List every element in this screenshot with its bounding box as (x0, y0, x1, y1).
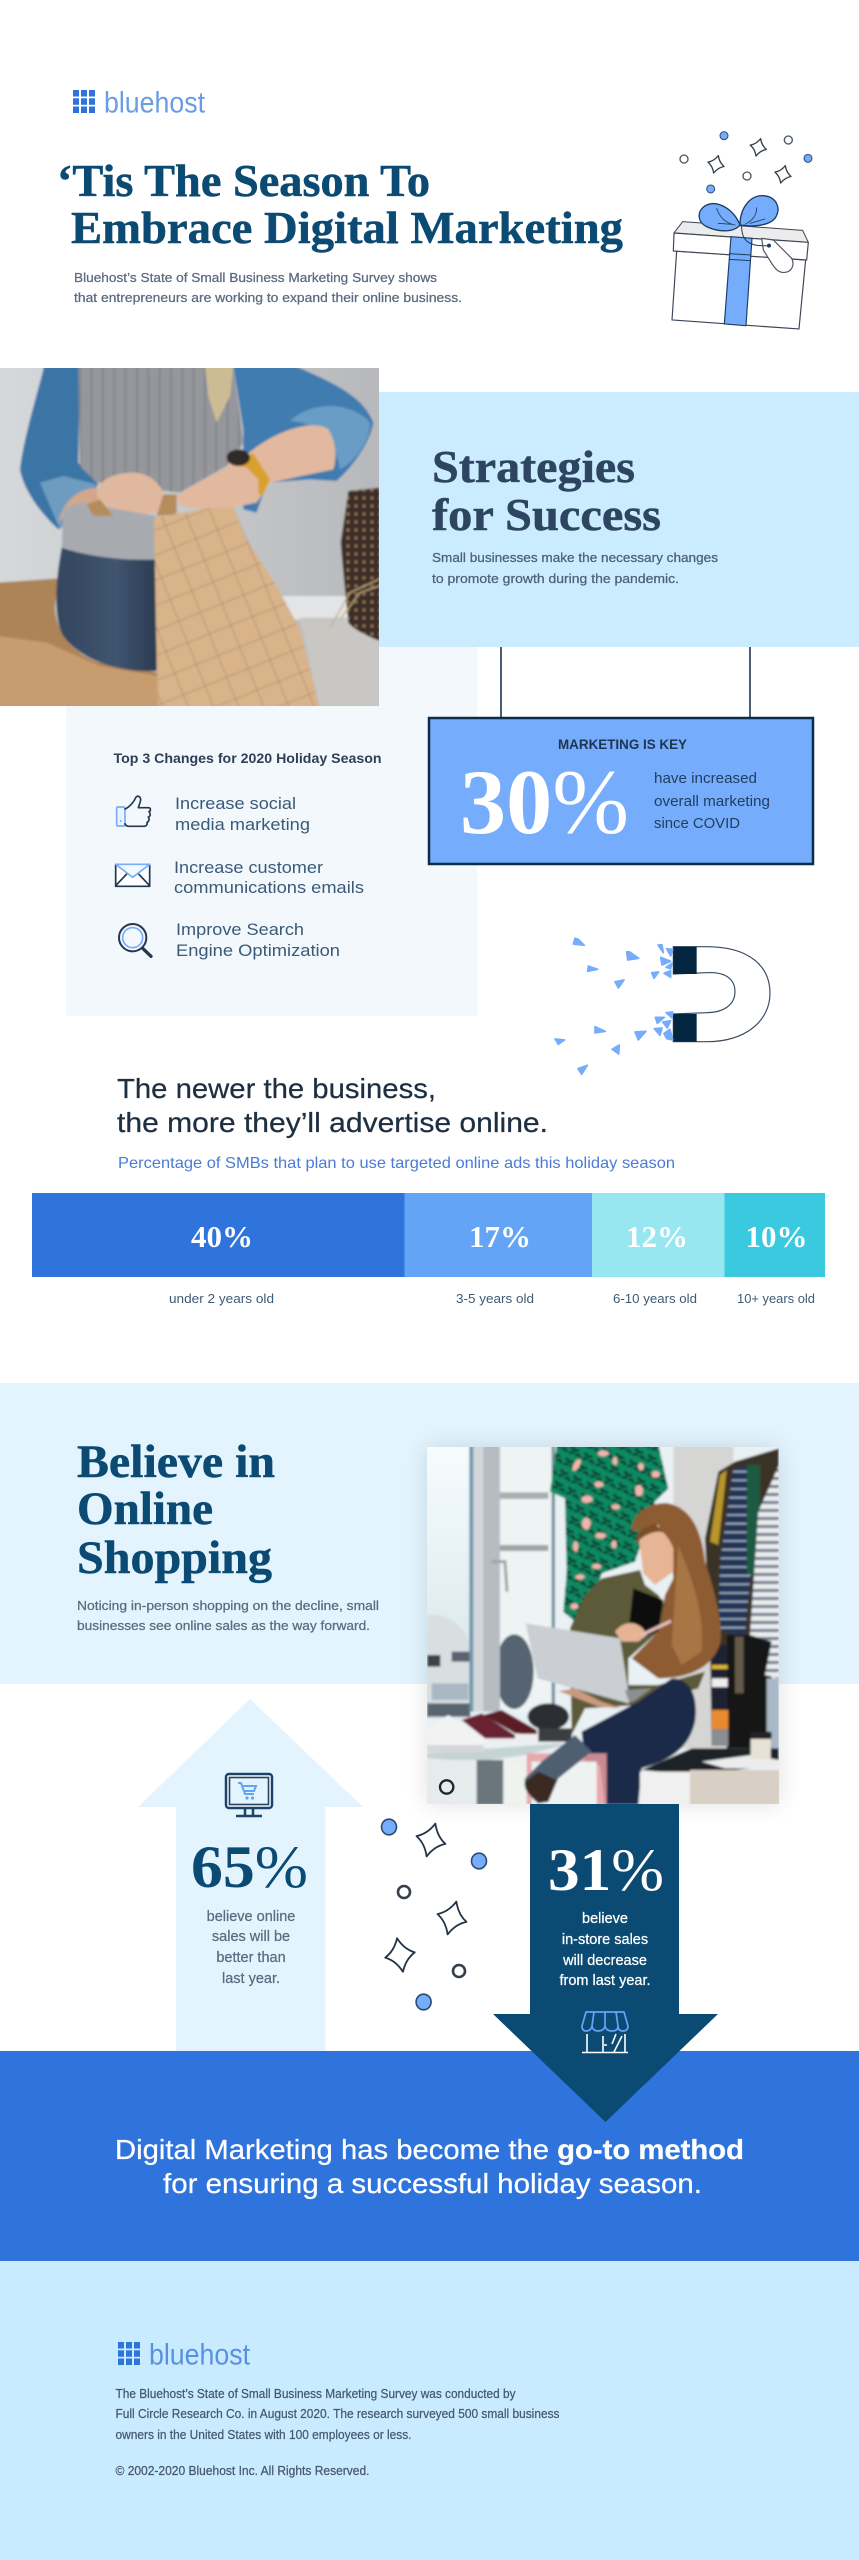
text: online shopping intro (77, 1598, 379, 1633)
logo: bluehost footer: bluehost (149, 2338, 251, 2372)
heading: believe in online shopping: Online (77, 1483, 213, 1535)
heading: believe in online shopping (77, 1436, 275, 1584)
heading: believe in online shopping: Shopping (77, 1532, 272, 1584)
arrow: up 65 percent: better than (216, 1950, 286, 1966)
text: increase customer communications emails (174, 858, 364, 897)
bar chart: targeted online ads by business age: 6-10 years old (613, 1291, 697, 1306)
text: improve search engine optimization: Improve Search (176, 920, 304, 939)
bar chart: targeted online ads by business age: 10+ years old (737, 1291, 815, 1306)
heading: the newer the business: The newer the business, (117, 1073, 436, 1104)
bar chart: targeted online ads by business age: 12% (626, 1219, 688, 1254)
bar chart: targeted online ads by business age: 17% (469, 1219, 531, 1254)
sign: marketing is key: since COVID (654, 816, 740, 832)
arrow: up 65 percent: believe online (207, 1909, 295, 1925)
arrow: down 31 percent (493, 1804, 718, 2122)
bar chart: targeted online ads by business age: 40% (191, 1219, 253, 1254)
intro text: Bluehost’s State of Small Business Marketing Survey shows (74, 270, 438, 285)
icon: storefront (582, 2012, 628, 2052)
arrow: up 65 percent: 65% (191, 1834, 308, 1900)
text: increase social media marketing: media marketing (175, 815, 310, 834)
arrow: up 65 percent: sales will be (212, 1929, 290, 1945)
icon: thumbs up (117, 796, 150, 826)
conclusion text: Digital Marketing has become the go-to method (115, 2134, 744, 2165)
panel: top 3 changes background (66, 647, 477, 1016)
arrow: down 31 percent: will decrease (562, 1953, 647, 1969)
panel: blue conclusion band (0, 2051, 859, 2261)
text: increase customer communications emails: communications emails (174, 878, 364, 897)
heading: top 3 changes: Top 3 Changes for 2020 Holiday Season (114, 751, 382, 766)
bar chart: targeted online ads by business age (32, 1193, 825, 1306)
intro text: that entrepreneurs are working to expand their online business. (74, 290, 462, 305)
arrow: up 65 percent: last year. (222, 1971, 280, 1987)
heading: the newer the business: the more they’ll advertise online. (117, 1107, 548, 1138)
heading: strategies for success (432, 441, 661, 540)
conclusion text: for ensuring a successful holiday season. (163, 2168, 702, 2199)
arrow: down 31 percent: believe (582, 1911, 628, 1927)
text: improve search engine optimization: Engine Optimization (176, 941, 340, 960)
decoration: sparkles and dots (382, 1819, 486, 2010)
text: strategies intro: to promote growth during the pandemic. (432, 571, 679, 586)
title: Embrace Digital Marketing (71, 202, 623, 253)
bar chart: targeted online ads by business age: 3-5 years old (456, 1291, 534, 1306)
arrow: down 31 percent: in-store sales (562, 1932, 648, 1948)
bar chart: targeted online ads by business age: 10% (746, 1219, 808, 1254)
icon: magnet attracting particles (555, 938, 770, 1074)
title (57, 155, 623, 253)
intro text (74, 270, 462, 305)
footer text: survey note: Full Circle Research Co. in August 2020. The research surveyed 500 small business (116, 2406, 560, 2421)
sign: marketing is key: overall marketing (654, 794, 770, 810)
conclusion text (115, 2134, 744, 2199)
text: increase social media marketing: Increase social (175, 794, 296, 813)
icon: monitor with shopping cart (226, 1774, 272, 1816)
panel: strategies background (379, 392, 859, 647)
sign: marketing is key: MARKETING IS KEY (558, 737, 687, 752)
photo: hands wrapping a gift in a pot (0, 366, 383, 709)
text: strategies intro: Small businesses make the necessary changes (432, 550, 719, 565)
sign: marketing is key: 30% (460, 751, 629, 853)
icon: gift box with confetti (672, 132, 812, 329)
arrow: down 31 percent: 31% (548, 1837, 664, 1903)
text: online shopping intro: businesses see online sales as the way forward. (77, 1618, 370, 1633)
logo: bluehost header: bluehost (104, 86, 206, 120)
title: ‘Tis The Season To (57, 155, 430, 206)
icon: magnifying glass (119, 924, 151, 956)
heading: strategies for success: for Success (432, 489, 661, 540)
text: improve search engine optimization (176, 920, 340, 960)
text: strategies intro (432, 550, 719, 586)
footer text: survey note (116, 2386, 560, 2478)
text: online shopping intro: Noticing in-person shopping on the decline, small (77, 1598, 379, 1613)
sign: marketing is key (429, 647, 813, 864)
icon: envelope (116, 864, 150, 886)
chart subtitle: Percentage of SMBs that plan to use targeted online ads this holiday season (118, 1155, 675, 1172)
footer text: survey note: owners in the United States with 100 employees or less. (116, 2427, 412, 2442)
heading: the newer the business (117, 1073, 548, 1138)
footer text: survey note: The Bluehost’s State of Small Business Marketing Survey was conducted by (116, 2386, 516, 2401)
shadow of shopping photo (427, 1447, 779, 1804)
text: increase social media marketing (175, 794, 310, 834)
panel: footer background (0, 2261, 859, 2560)
text: increase customer communications emails: Increase customer (174, 858, 323, 877)
sign: marketing is key: have increased (654, 771, 757, 787)
heading: strategies for success: Strategies (432, 441, 635, 492)
arrow: down 31 percent: from last year. (559, 1973, 651, 1989)
heading: believe in online shopping: Believe in (77, 1436, 275, 1488)
footer text: survey note: © 2002-2020 Bluehost Inc. All Rights Reserved. (116, 2463, 370, 2478)
arrow: up 65 percent (138, 1699, 363, 2051)
bar chart: targeted online ads by business age: under 2 years old (169, 1291, 274, 1306)
panel: believe in online shopping background (0, 1383, 859, 1684)
photo: woman with laptop in a clothing store (425, 1445, 782, 1807)
